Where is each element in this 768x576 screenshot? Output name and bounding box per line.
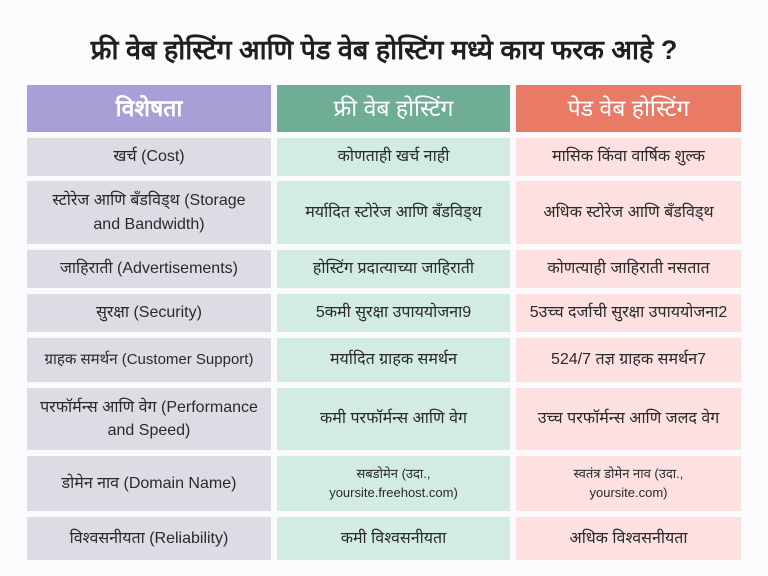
header: free: फ्री वेब होस्टिंग — [333, 95, 454, 121]
title: फ्री वेब होस्टिंग आणि पेड वेब होस्टिंग मध्ये काय फरक आहे ? — [91, 35, 677, 65]
row: domain: डोमेन नाव (Domain Name) — [62, 475, 236, 492]
table — [27, 85, 741, 560]
row: ads — [27, 250, 741, 288]
row: storage — [27, 181, 741, 244]
row: storage: and Bandwidth) — [93, 216, 205, 232]
header: free — [277, 85, 510, 132]
row: security: 5कमी सुरक्षा उपाययोजना9 — [316, 304, 471, 321]
row: performance: and Speed) — [108, 422, 190, 439]
row: security: सुरक्षा (Security) — [96, 304, 202, 321]
row: security: 5उच्च दर्जाची सुरक्षा उपाययोजना2 — [530, 304, 727, 321]
row: reliability — [27, 517, 741, 560]
row: ads: कोणत्याही जाहिराती नसतात — [547, 260, 710, 277]
row: performance: कमी परफॉर्मन्स आणि वेग — [320, 410, 467, 427]
row: ads: जाहिराती (Advertisements) — [60, 260, 238, 277]
row: storage: स्टोरेज आणि बँडविड्थ (Storage — [52, 192, 246, 209]
row: domain: सबडोमेन (उदा., — [356, 466, 431, 481]
row: cost — [27, 138, 741, 176]
row: support — [27, 338, 741, 382]
row: security — [27, 294, 741, 332]
row: domain: स्वतंत्र डोमेन नाव (उदा., — [574, 466, 683, 481]
row: storage: मर्यादित स्टोरेज आणि बँडविड्थ — [305, 204, 482, 221]
row: reliability: विश्वसनीयता (Reliability) — [70, 530, 228, 547]
row: reliability: अधिक विश्वसनीयता — [569, 530, 688, 547]
row: support: 524/7 तज्ञ ग्राहक समर्थन7 — [551, 351, 706, 368]
header: paid — [516, 85, 741, 132]
row: cost: खर्च (Cost) — [113, 148, 185, 165]
row: storage: अधिक स्टोरेज आणि बँडविड्थ — [543, 204, 714, 221]
row: performance: उच्च परफॉर्मन्स आणि जलद वेग — [538, 410, 719, 427]
row: cost: मासिक किंवा वार्षिक शुल्क — [552, 148, 705, 165]
row: support: मर्यादित ग्राहक समर्थन — [330, 351, 457, 368]
row: cost: कोणताही खर्च नाही — [338, 148, 449, 165]
row: support: ग्राहक समर्थन (Customer Support) — [45, 351, 253, 368]
row: reliability: कमी विश्वसनीयता — [341, 530, 446, 547]
row: domain — [27, 456, 741, 511]
header: paid: पेड वेब होस्टिंग — [568, 95, 689, 121]
row: performance: परफॉर्मन्स आणि वेग (Performance — [40, 399, 258, 416]
row: performance — [27, 388, 741, 450]
row: ads: होस्टिंग प्रदात्याच्या जाहिराती — [313, 260, 474, 277]
row: domain: yoursite.freehost.com) — [329, 484, 458, 500]
header: feature: विशेषता — [116, 95, 182, 121]
row: domain: yoursite.com) — [589, 484, 668, 500]
header: feature — [27, 85, 271, 132]
